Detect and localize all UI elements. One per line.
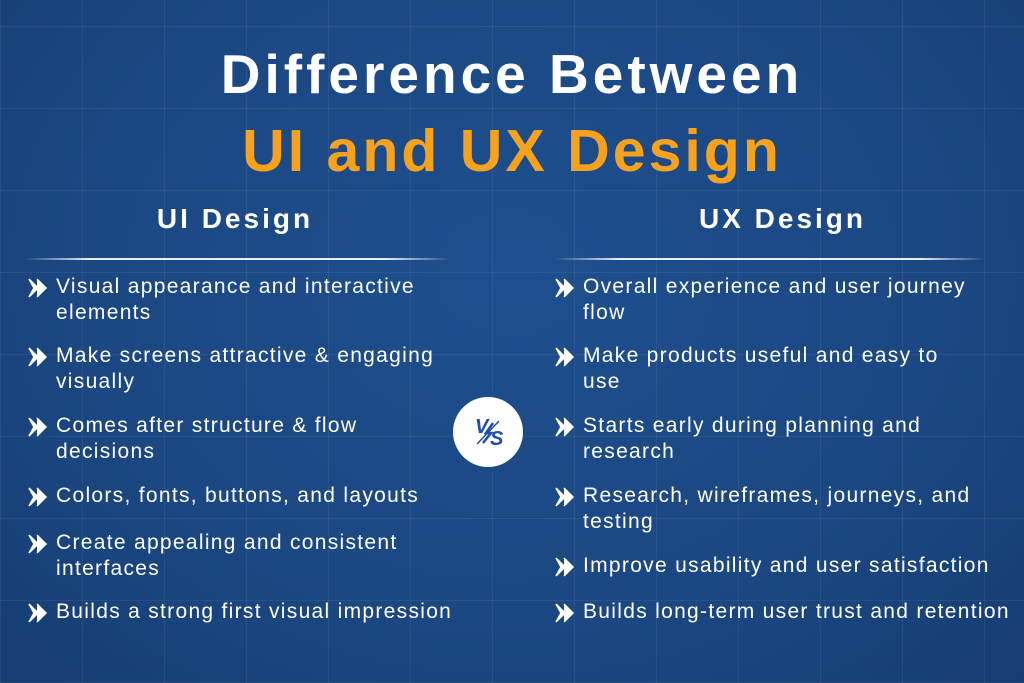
item — [28, 275, 415, 324]
item: flow — [583, 301, 626, 324]
item — [28, 344, 434, 393]
item — [555, 414, 921, 463]
item: research — [583, 440, 675, 463]
item: Builds a strong first visual impression — [56, 600, 452, 623]
item — [555, 275, 966, 324]
heading: UI Design: UI Design — [157, 203, 313, 234]
panel: UX list — [555, 275, 1010, 623]
item — [555, 344, 939, 393]
icon: VS circle: V — [475, 416, 490, 438]
item: testing — [583, 510, 654, 533]
item: Builds long-term user trust and retention — [583, 600, 1010, 623]
heading: UX Design: UX Design — [699, 203, 866, 234]
title: Difference Between — [221, 43, 803, 105]
item: Starts early during planning and — [583, 414, 921, 437]
item: Make products useful and easy to — [583, 344, 939, 367]
item: Research, wireframes, journeys, and — [583, 484, 970, 507]
icon: VS circle — [453, 397, 523, 467]
item: Comes after structure & flow — [56, 414, 357, 437]
item: visually — [56, 370, 135, 393]
subtitle: UI and UX Design — [242, 118, 782, 184]
item — [28, 414, 357, 463]
panel: UI list — [28, 275, 452, 623]
item: Make screens attractive & engaging — [56, 344, 434, 367]
item: Visual appearance and interactive — [56, 275, 415, 298]
item: elements — [56, 301, 152, 324]
item — [555, 484, 970, 533]
item: interfaces — [56, 557, 160, 580]
item: Overall experience and user journey — [583, 275, 966, 298]
item: Improve usability and user satisfaction — [583, 554, 990, 577]
item — [28, 531, 398, 580]
item: decisions — [56, 440, 155, 463]
item: Colors, fonts, buttons, and layouts — [56, 484, 419, 507]
item: use — [583, 370, 621, 393]
item: Create appealing and consistent — [56, 531, 398, 554]
icon: VS circle: S — [490, 428, 504, 450]
